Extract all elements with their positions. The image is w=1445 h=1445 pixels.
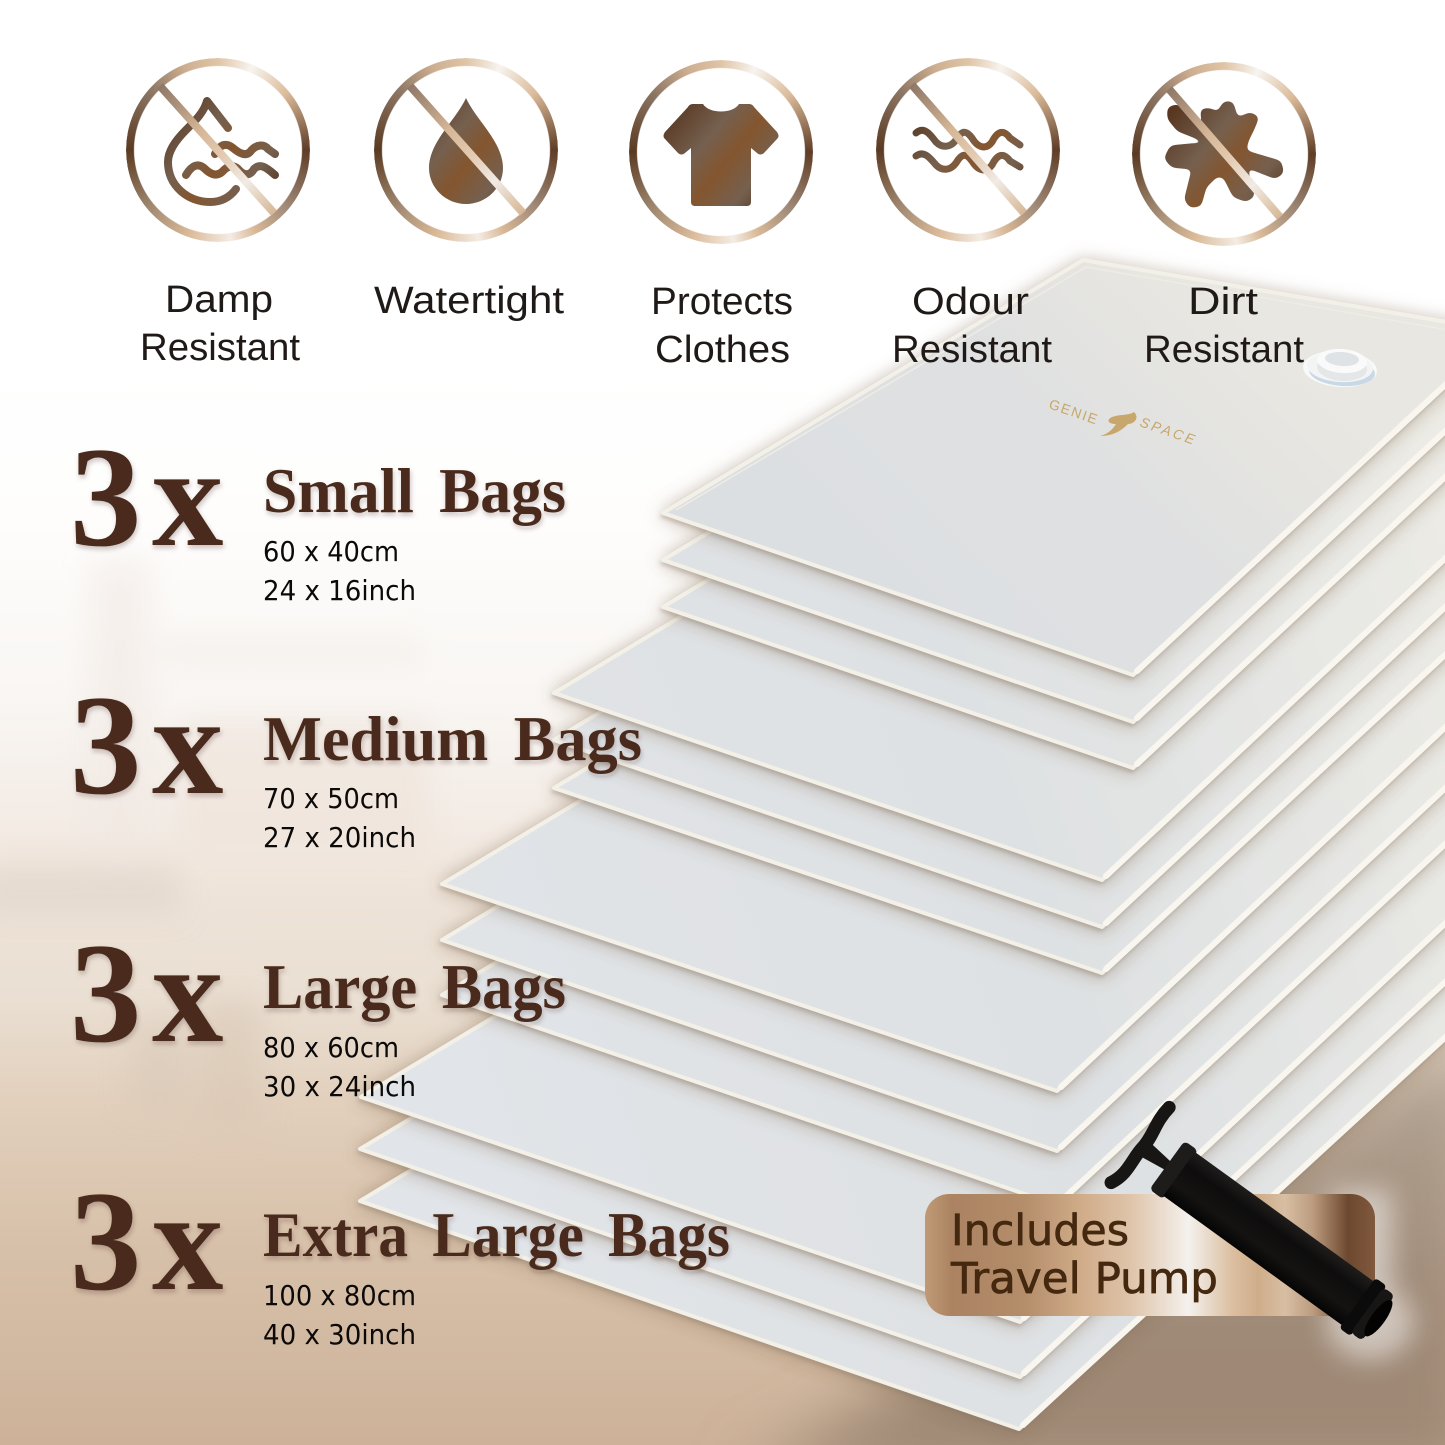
icon: odour resistant — [876, 58, 1060, 242]
glyph: drop and slash — [408, 84, 526, 216]
size row: large bags: 3 — [70, 914, 142, 1072]
ring — [374, 58, 558, 242]
size row: small bags: 60 x 40cm — [263, 535, 399, 568]
label: damp resistant: Resistant — [140, 327, 300, 369]
icon: dirt resistant — [1132, 62, 1316, 246]
label: odour resistant: Resistant — [892, 329, 1052, 371]
label: damp resistant — [140, 279, 300, 369]
brand logo — [1047, 396, 1199, 448]
glyph: drop with waves and slash — [158, 84, 279, 216]
glyph: waves and slash — [910, 82, 1027, 216]
label: dirt resistant: Resistant — [1144, 329, 1304, 371]
label: dirt resistant: Dirt — [1188, 281, 1259, 323]
label: odour resistant — [892, 281, 1052, 371]
extra large bag 3 — [360, 900, 1445, 1429]
medium bag 1 — [554, 420, 1445, 880]
large bag 2 — [442, 650, 1445, 1151]
small bag 1 (top bag) — [663, 260, 1445, 675]
size row: extra large bags: Extra Large Bags — [263, 1200, 730, 1270]
size row: medium bags: 27 x 20inch — [263, 821, 416, 854]
air valve — [1302, 347, 1378, 390]
size row: extra large bags: 3 — [70, 1162, 142, 1320]
size row: extra large bags: x — [152, 1162, 224, 1320]
size row: medium bags: 70 x 50cm — [263, 782, 399, 815]
brand logo: GENIE — [1047, 396, 1101, 428]
size row: large bags: Large Bags — [263, 952, 566, 1022]
size row: medium bags — [70, 666, 642, 854]
label: watertight: Watertight — [374, 280, 564, 322]
callout badge: includes travel pump: Includes — [951, 1206, 1129, 1256]
size row: large bags: x — [152, 914, 224, 1072]
small bag 3 — [663, 354, 1445, 768]
glyph: splat and slash — [1165, 86, 1284, 220]
label: dirt resistant — [1144, 281, 1304, 371]
ring — [126, 58, 310, 242]
label: protects clothes — [651, 281, 793, 371]
size row: small bags — [70, 418, 566, 607]
label: odour resistant: Odour — [912, 281, 1029, 323]
label: protects clothes: Clothes — [655, 329, 790, 371]
size row: large bags — [70, 914, 566, 1103]
icon: damp resistant — [126, 58, 310, 242]
medium bag 3 — [554, 520, 1445, 973]
small bag 2 — [663, 307, 1445, 722]
pump glow — [1326, 1190, 1414, 1360]
glyph: t-shirt — [664, 104, 778, 206]
size row: large bags: 30 x 24inch — [263, 1070, 416, 1103]
large bag 3 — [442, 700, 1445, 1205]
size row: small bags: 24 x 16inch — [263, 574, 416, 607]
callout badge: includes travel pump: Travel Pump — [950, 1254, 1218, 1304]
size row: extra large bags — [70, 1162, 730, 1351]
label: damp resistant: Damp — [165, 279, 273, 321]
icon: protects clothes — [629, 60, 813, 244]
extra large bag 2 — [360, 840, 1445, 1377]
size row: medium bags: x — [152, 666, 224, 824]
size row: small bags: 3 — [70, 418, 142, 576]
ring — [876, 58, 1060, 242]
stack of vacuum bags — [360, 260, 1445, 1429]
ring — [1132, 62, 1316, 246]
size row: small bags: Small Bags — [263, 456, 566, 526]
brand logo: SPACE — [1138, 414, 1199, 448]
callout badge: includes travel pump — [925, 1194, 1375, 1316]
medium bag 2 — [554, 470, 1445, 927]
icon: travel pump — [1111, 1106, 1412, 1360]
large bag 1 — [442, 590, 1445, 1091]
size row: medium bags: Medium Bags — [263, 704, 642, 774]
size row: small bags: x — [152, 418, 224, 576]
icon: watertight — [374, 58, 558, 242]
feature labels — [140, 279, 1304, 371]
size row: extra large bags: 100 x 80cm — [263, 1279, 416, 1312]
size row: extra large bags: 40 x 30inch — [263, 1318, 416, 1351]
ring — [629, 60, 813, 244]
label: protects clothes: Protects — [651, 281, 793, 323]
extra large bag 1 — [361, 780, 1445, 1322]
size row: large bags: 80 x 60cm — [263, 1031, 399, 1064]
size row: medium bags: 3 — [70, 666, 142, 824]
